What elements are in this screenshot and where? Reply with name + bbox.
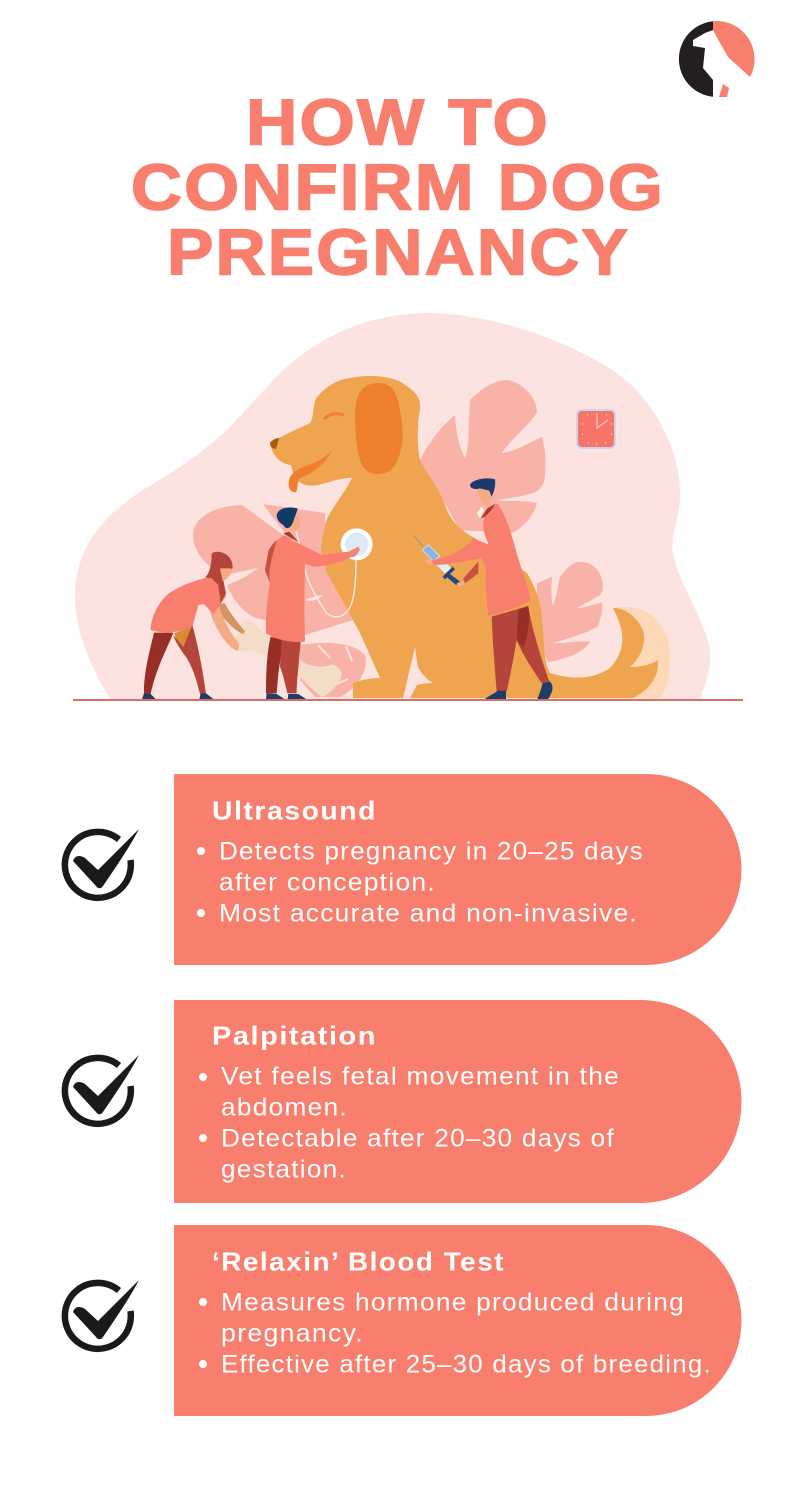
man shoes: [485, 682, 553, 699]
syringe vet: [414, 478, 553, 699]
background blob: [75, 313, 710, 699]
heading: relaxin blood test: ‘Relaxin’ Blood Test: [212, 1246, 505, 1276]
woman front arm: [210, 607, 239, 651]
bullet list: Measures hormone produced during: [221, 1288, 685, 1316]
woman hair: [205, 552, 233, 603]
lower left leaf: [300, 643, 366, 697]
woman face: [220, 568, 232, 581]
bullet list: Most accurate and non-invasive.: [219, 900, 638, 928]
woman shirt: [151, 576, 226, 632]
bullet list: gestation.: [221, 1156, 347, 1184]
dog eye: [325, 414, 343, 418]
panel: ultrasound: [174, 774, 742, 965]
bullet list: Vet feels fetal movement in the: [221, 1062, 620, 1090]
tail tip: [613, 607, 670, 698]
dog: [270, 376, 658, 698]
title: [131, 86, 665, 288]
man leg shade: [517, 606, 529, 648]
man hair: [470, 478, 495, 497]
card background: [174, 774, 742, 965]
right large leaf: [420, 380, 546, 533]
vet collar: [283, 532, 298, 542]
stethoscope tube: [293, 527, 356, 617]
dog nose: [270, 438, 279, 449]
man back hand: [457, 581, 464, 586]
bullet list: [199, 1288, 712, 1378]
icon: check mark palpitation: [65, 1055, 139, 1124]
man collar: [481, 503, 496, 518]
dog ear: [355, 383, 403, 474]
woman back arm: [217, 603, 245, 634]
man face: [477, 488, 492, 507]
man legs: [492, 606, 550, 692]
man coat: [480, 503, 531, 616]
right small leaf: [537, 562, 603, 662]
vet hair: [277, 507, 298, 528]
title: HOW TO: [246, 86, 550, 158]
heading: ultrasound: Ultrasound: [212, 796, 377, 826]
syringe: [414, 536, 460, 585]
vet arm: [292, 542, 352, 567]
illustration: vets examining a pregnant dog: [73, 313, 743, 701]
stethoscope head: [341, 528, 373, 560]
gap between dog legs: [403, 647, 433, 698]
panel: relaxin blood test: [174, 1225, 742, 1416]
bullet list: Detectable after 20–30 days of: [221, 1124, 615, 1152]
card background: [174, 1000, 742, 1203]
vet coat: [265, 535, 305, 642]
vet front leg: [280, 640, 301, 693]
man scarf: [477, 507, 484, 518]
bullet list: after conception.: [219, 868, 436, 896]
ground line: [73, 699, 743, 701]
bullet list: Effective after 25–30 days of breeding.: [221, 1350, 712, 1378]
woman front leg: [173, 625, 206, 694]
vet face: [283, 515, 300, 532]
logo: [679, 21, 760, 100]
woman dog shape: [174, 626, 193, 647]
vet hand: [348, 547, 360, 557]
woman shoes: [142, 693, 214, 699]
left leaf vein: [305, 595, 323, 601]
stethoscope vet: [265, 507, 373, 699]
bullet list: pregnancy.: [221, 1320, 364, 1348]
heading: palpitation: Palpitation: [212, 1020, 377, 1050]
bullet list: [197, 838, 644, 928]
icon: check mark relaxin: [65, 1280, 139, 1349]
man back arm: [463, 562, 478, 583]
bullet list: abdomen.: [221, 1094, 348, 1122]
icon: check mark ultrasound: [65, 829, 139, 898]
dog tongue: [289, 450, 332, 492]
man front hand: [425, 558, 433, 565]
bone: [234, 619, 342, 697]
left leaf: [193, 504, 353, 635]
woman back leg: [144, 633, 173, 694]
bullet list: [199, 1062, 620, 1184]
card background: [174, 1225, 742, 1416]
man front arm: [432, 538, 490, 565]
vet back leg: [266, 637, 283, 693]
panel: palpitation: [174, 1000, 742, 1203]
vet coat fold: [265, 540, 277, 583]
title: CONFIRM DOG: [131, 150, 665, 224]
bullet list: Detects pregnancy in 20–25 days: [219, 838, 644, 866]
vet shoes: [266, 693, 307, 699]
woman vet: [142, 552, 245, 699]
title: PREGNANCY: [167, 216, 630, 288]
wall clock: [577, 410, 615, 448]
